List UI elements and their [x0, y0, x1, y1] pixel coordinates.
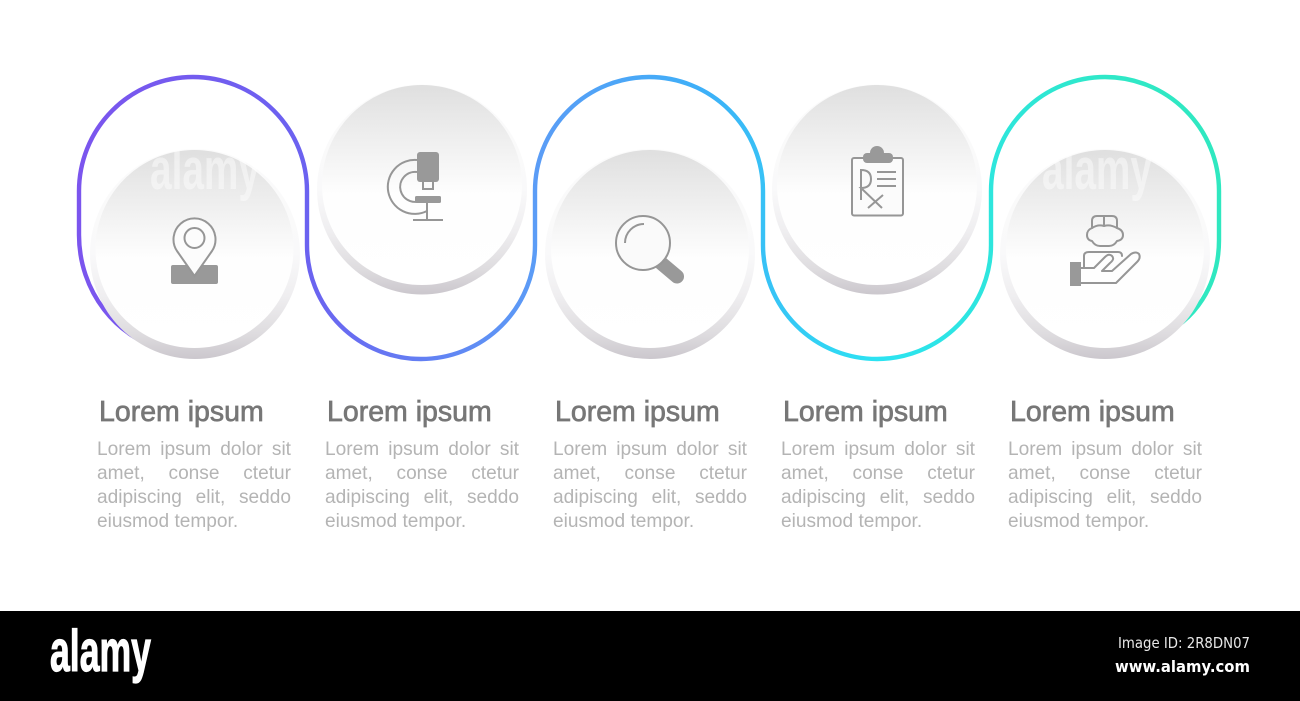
body 1: adipiscing elit, seddo: [97, 487, 291, 508]
heading 3: Lorem ipsum: [555, 396, 720, 428]
body 3: amet, conse ctetur: [553, 463, 747, 484]
icon: map pin: [171, 218, 218, 284]
text column 3: [553, 396, 747, 532]
body 1: Lorem ipsum dolor sit: [97, 439, 291, 460]
disc 2: [317, 84, 527, 294]
text column 1: [97, 396, 291, 532]
icon: microscope: [388, 152, 443, 220]
heading 4: Lorem ipsum: [783, 396, 948, 428]
heading 2: Lorem ipsum: [327, 396, 492, 428]
disc 3: [545, 149, 755, 359]
body 5: [1008, 439, 1202, 532]
body 4: amet, conse ctetur: [781, 463, 975, 484]
text column 4: [781, 396, 975, 532]
watermark: alamy disc 5: alamy: [1042, 137, 1152, 202]
body 2: eiusmod tempor.: [325, 511, 466, 532]
body 1: [97, 439, 291, 532]
disc 1: [90, 137, 300, 359]
body 5: adipiscing elit, seddo: [1008, 487, 1202, 508]
body 3: adipiscing elit, seddo: [553, 487, 747, 508]
footer url: www.alamy.com: [1115, 657, 1250, 676]
body 4: eiusmod tempor.: [781, 511, 922, 532]
icon: magnifier: [616, 216, 677, 276]
heading 5: Lorem ipsum: [1010, 396, 1175, 428]
body 5: amet, conse ctetur: [1008, 463, 1202, 484]
disc 5: [1000, 137, 1210, 359]
body 2: adipiscing elit, seddo: [325, 487, 519, 508]
body 5: Lorem ipsum dolor sit: [1008, 439, 1202, 460]
body 3: Lorem ipsum dolor sit: [553, 439, 747, 460]
body 4: [781, 439, 975, 532]
footer logo: alamy: [50, 619, 151, 684]
footer bar: [0, 611, 1300, 701]
heading 1: Lorem ipsum: [99, 396, 264, 428]
ribbon: gradient wave outline: [79, 77, 1219, 359]
body 1: amet, conse ctetur: [97, 463, 291, 484]
icon: prescription clipboard: [852, 146, 903, 216]
text column 5: [1008, 396, 1202, 532]
body 3: eiusmod tempor.: [553, 511, 694, 532]
footer image id: Image ID: 2R8DN07: [1118, 634, 1250, 652]
watermark: alamy disc 1: alamy: [150, 137, 260, 202]
disc 4: [772, 84, 982, 294]
body 2: amet, conse ctetur: [325, 463, 519, 484]
body 2: Lorem ipsum dolor sit: [325, 439, 519, 460]
body 4: Lorem ipsum dolor sit: [781, 439, 975, 460]
body 2: [325, 439, 519, 532]
icon: hand holding patient: [1070, 216, 1140, 286]
text column 2: [325, 396, 519, 532]
body 1: eiusmod tempor.: [97, 511, 238, 532]
body 5: eiusmod tempor.: [1008, 511, 1149, 532]
body 4: adipiscing elit, seddo: [781, 487, 975, 508]
body 3: [553, 439, 747, 532]
